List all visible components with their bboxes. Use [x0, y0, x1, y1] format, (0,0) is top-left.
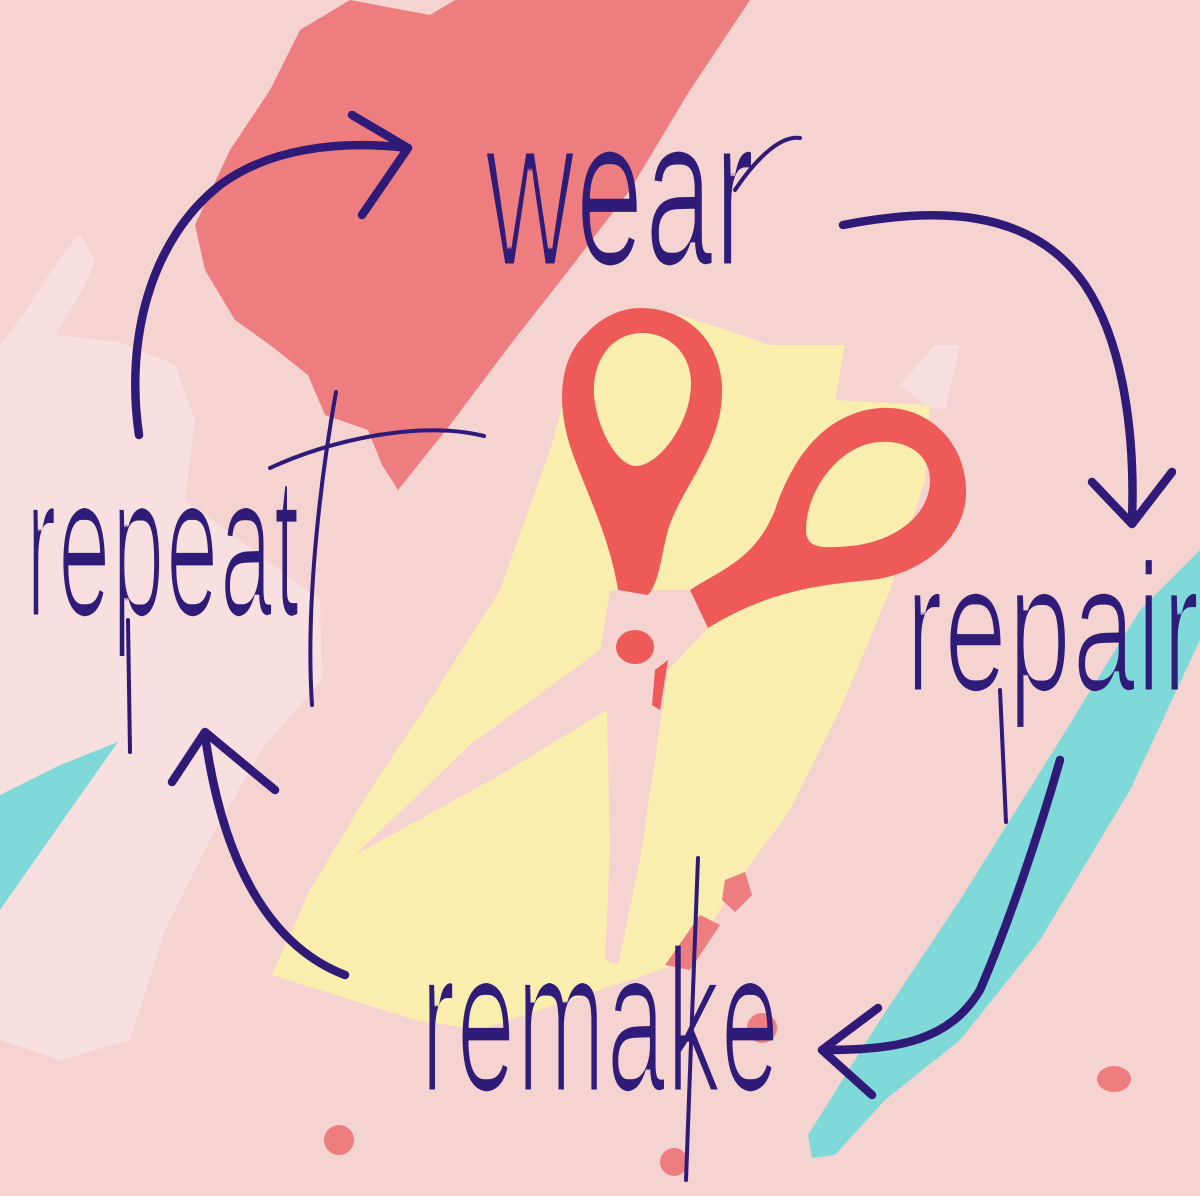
label: wear: wear [484, 74, 755, 309]
scissors blades [355, 590, 708, 965]
yellow brush stroke [272, 315, 930, 1030]
arrow: repair to remake [822, 760, 1060, 1095]
icon: scissors [355, 308, 966, 965]
label: repeat: repeat [25, 435, 300, 658]
blade accent [652, 660, 668, 710]
pale brush strokes on the left [0, 235, 322, 1060]
label: repeat [25, 392, 484, 752]
teal stroke right [808, 550, 1200, 1158]
right handle [690, 408, 966, 628]
left handle [562, 308, 722, 595]
label: repair [905, 528, 1200, 822]
arrow: repeat to wear [135, 115, 408, 435]
pivot screw [616, 630, 654, 664]
arrow: wear to repair [843, 215, 1172, 524]
dots [324, 872, 1131, 1176]
pale stroke right of scissors [900, 345, 960, 410]
label: remake [420, 858, 780, 1180]
arrow: remake to repeat [172, 732, 345, 975]
red brush stroke [195, 0, 750, 490]
label: wear [484, 74, 800, 309]
teal stroke left [0, 742, 118, 910]
label: remake: remake [420, 910, 780, 1133]
